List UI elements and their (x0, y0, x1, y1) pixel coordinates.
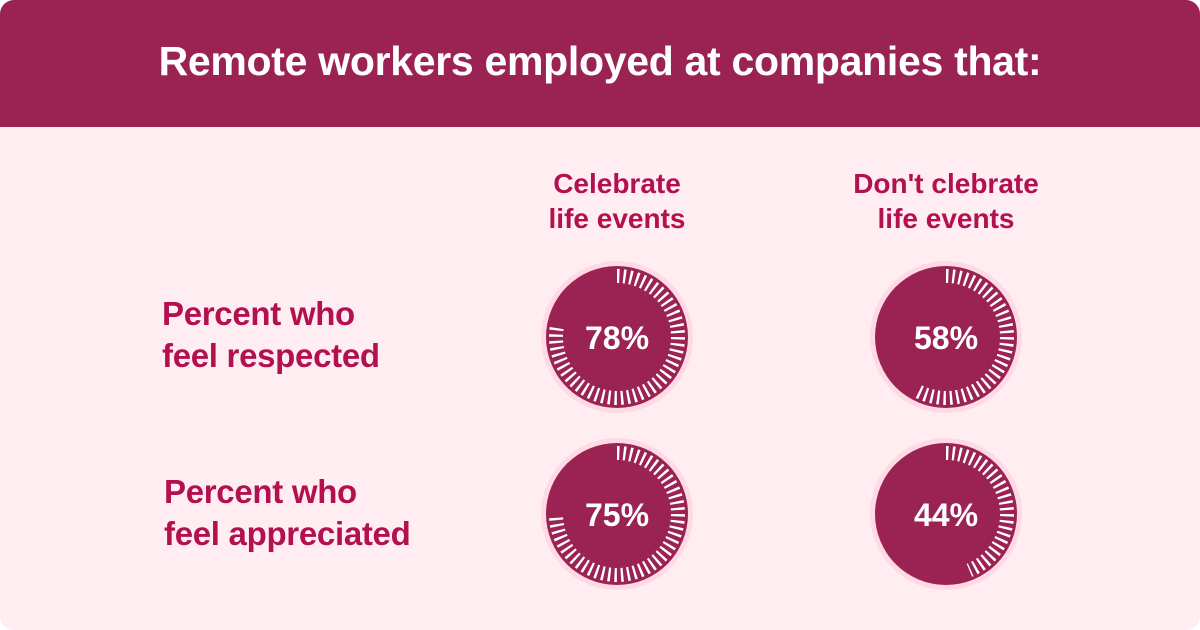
header bar (0, 0, 1200, 127)
row label: appreciated (164, 473, 410, 552)
column heading: celebrate: Celebrate (553, 168, 681, 199)
row label: respected: feel respected (162, 337, 380, 374)
column heading: celebrate (549, 168, 685, 234)
title: Remote workers employed at companies that: (159, 38, 1041, 84)
gauge: 78%: 78% (585, 320, 649, 356)
gauges (541, 261, 1022, 590)
column heading: celebrate: life events (549, 203, 685, 234)
gauge: 44%: 44% (914, 497, 978, 533)
row label: respected (162, 295, 380, 374)
row label: respected: Percent who (162, 295, 355, 332)
column heading: don't celebrate: life events (878, 203, 1014, 234)
row label: appreciated: Percent who (164, 473, 357, 510)
gauge: 75%: 75% (585, 497, 649, 533)
gauge: 75% (541, 438, 693, 590)
column heading: don't celebrate: Don't clebrate (853, 168, 1039, 199)
gauge: 78% (541, 261, 693, 413)
gauge: 58% (870, 261, 1022, 413)
gauge: 44% (870, 438, 1022, 590)
gauge: 58%: 58% (914, 320, 978, 356)
column heading: don't celebrate (853, 168, 1039, 234)
row label: appreciated: feel appreciated (164, 515, 410, 552)
